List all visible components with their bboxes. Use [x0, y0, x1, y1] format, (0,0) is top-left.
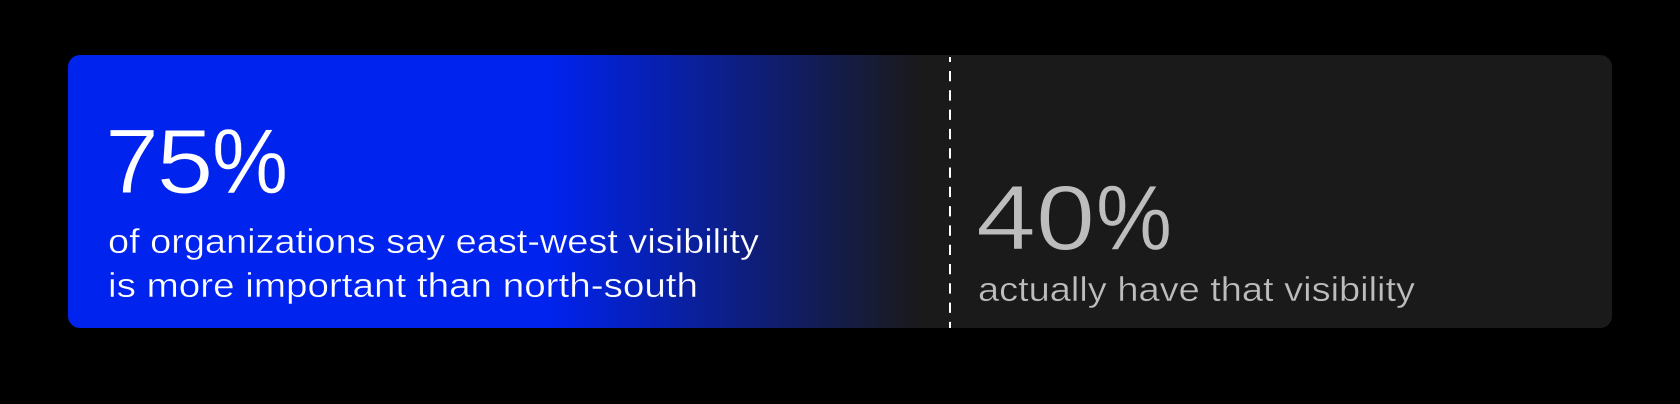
stat: 40%: 4 [976, 168, 1036, 270]
text block: 75% description: of organizations say east-west visibility [108, 223, 759, 261]
stat: 75% [105, 111, 288, 213]
panel: stat card [68, 55, 1612, 328]
stat: 40% [976, 168, 1172, 270]
stat: 40%: % [1096, 168, 1172, 270]
stat: 75%: % [212, 111, 288, 213]
divider: dashed line [949, 57, 951, 328]
stat: 40%: 0 [1036, 168, 1095, 270]
stat: 75%: 7 [105, 111, 159, 213]
text block: 75% description: is more important than north-south [108, 267, 698, 305]
text block: 75% description [108, 223, 759, 305]
text block: 40% description: actually have that visibility [978, 271, 1415, 309]
stat: 75%: 5 [156, 111, 214, 213]
